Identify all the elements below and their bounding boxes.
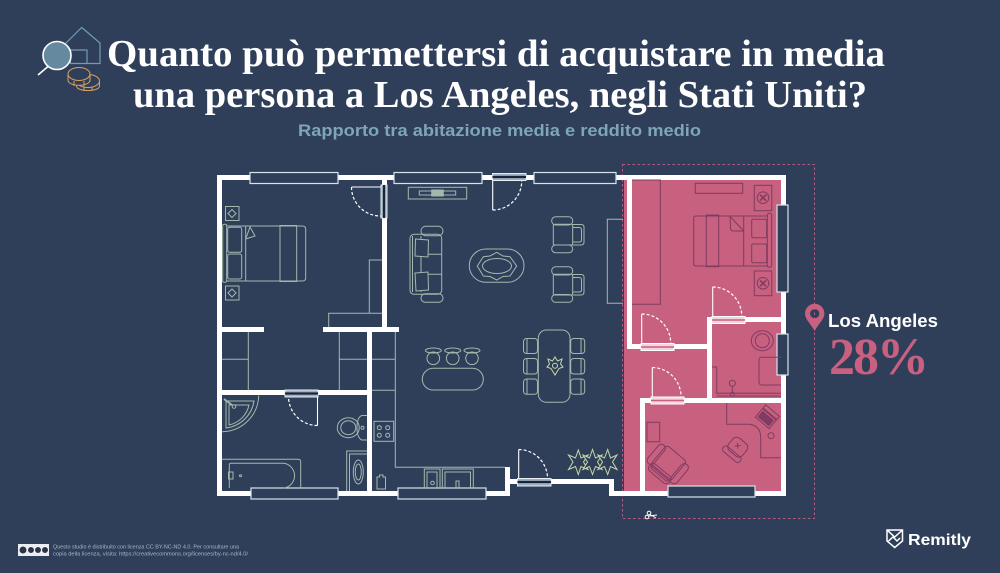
bathroom fixtures <box>222 396 367 491</box>
bar and stools <box>422 348 483 390</box>
title: Quanto può permettersi di acquistare in media <box>107 33 885 75</box>
doors <box>285 174 745 486</box>
Remitly logo <box>887 530 971 549</box>
bedroom furniture <box>222 206 382 390</box>
callout: Los Angeles 28%: 28% <box>829 329 929 386</box>
licence badge <box>18 544 49 556</box>
icon: house, magnifier and coins <box>38 28 100 91</box>
plants <box>568 450 617 474</box>
floor plan walls <box>217 175 786 496</box>
cut line around highlighted share <box>622 164 814 518</box>
windows <box>250 172 788 499</box>
pink bathroom fixtures <box>712 331 781 396</box>
icon: scissors <box>645 511 657 519</box>
highlighted share of floor plan <box>624 178 783 492</box>
Remitly logo: Remitly <box>908 532 971 549</box>
title <box>107 33 885 116</box>
licence text <box>53 544 248 558</box>
title: una persona a Los Angeles, negli Stati Uniti? <box>133 74 867 116</box>
icon: map pin <box>805 304 824 331</box>
pink office furniture <box>642 403 781 489</box>
licence text: Questo studio è distribuito con licenza CC BY-NC-ND 4.0. Per consultare una <box>53 544 240 550</box>
callout: Los Angeles 28%: Los Angeles <box>828 310 938 331</box>
subtitle: Rapporto tra abitazione media e reddito medio <box>298 121 701 140</box>
licence text: copia della licenza, visita: https://creativecommons.org/licenses/by-nc-nd/4.0/ <box>53 552 248 558</box>
kitchen counters and appliances <box>372 332 505 489</box>
pink master bedroom furniture <box>632 180 772 304</box>
callout: Los Angeles 28% <box>805 304 938 386</box>
dining table and chairs <box>524 330 585 402</box>
living room furniture <box>408 187 623 303</box>
